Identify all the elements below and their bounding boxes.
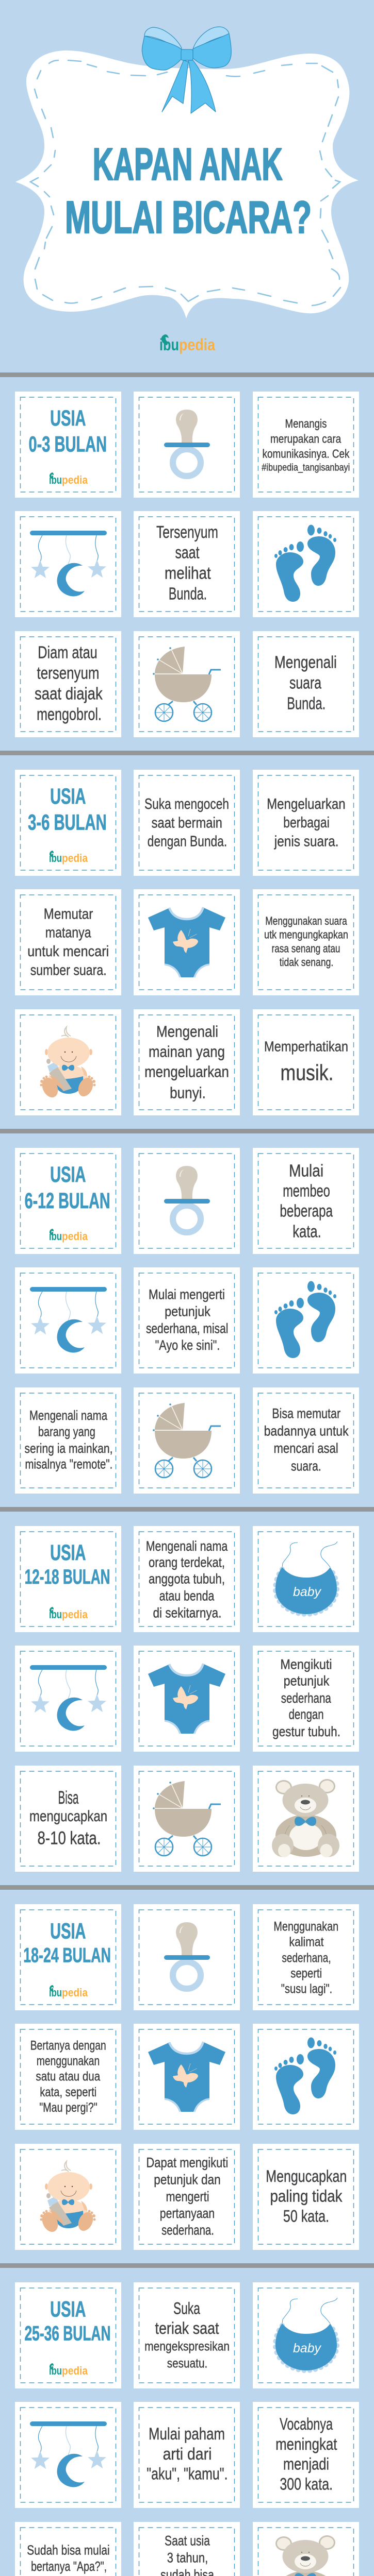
icon: baby [39,2161,96,2234]
text: menggunakan kalimat: sederhana, [282,1951,331,1965]
heading: usia 6-12 bulan [25,1162,110,1213]
icon: stroller [153,1781,221,1856]
text: menggunakan suara: rasa senang atau [271,942,340,955]
text: mengenali nama barang [25,1408,112,1472]
text: saat usia 3 tahun: Saat usia [165,2533,210,2549]
logo: ibupedia small: ibu [49,1230,62,1243]
text: diam atau [35,643,103,723]
text: vocabnya meningkat: Vocabnya [280,2415,333,2433]
text: bisa memutar: Bisa memutar [272,1405,340,1421]
text: menangis: komunikasinya. Cek [263,447,350,460]
text: mengenali mainan: bunyi. [170,1084,206,1102]
text: menggunakan kalimat: seperti [290,1966,322,1980]
text: bertanya dengan: Bertanya dengan [30,2038,106,2053]
text: mengenali nama orang [146,1538,228,1620]
heading: usia 0-3 bulan: USIA [50,406,86,431]
text: menggunakan suara [264,914,348,969]
logo: ibupedia [159,334,215,354]
logo: ibupedia small [49,1229,88,1243]
text: bertanya dengan: kata, seperti [40,2085,96,2099]
panel: card bib [253,1526,359,1632]
text: vocabnya meningkat [275,2415,337,2494]
text: mengenali mainan: mainan yang [149,1043,225,1061]
text: suka teriak: sesuatu. [167,2357,207,2371]
text: menangis: merupakan cara [270,432,341,445]
text: mulai membeo: kata. [292,1222,321,1241]
panel: card mobile [15,511,121,617]
panel: title plaque [15,50,359,318]
text: dapat mengikuti: Dapat mengikuti [146,2155,228,2171]
text: vocabnya meningkat: menjadi [283,2454,329,2473]
text: bisa memutar: mencari asal [273,1440,338,1456]
panel: card words text [15,1766,121,1872]
text: mengikuti petunjuk [272,1656,340,1739]
text: menggunakan kalimat [273,1919,338,1996]
text: saat usia 3 tahun [143,2533,231,2576]
panel: card onesie [134,1646,240,1752]
text: sudah bisa mulai: Sudah bisa mulai [27,2542,110,2557]
logo: ibupedia: ibu [159,335,179,354]
panel: card instruction text [134,1267,240,1374]
panel: card onesie [134,2024,240,2130]
text: menggunakan suara: utk mengungkapkan [264,928,348,941]
panel: card stroller [134,1387,240,1494]
text: tersenyum: Tersenyum [156,522,218,541]
heading: usia 3-6 bulan [28,784,107,835]
panel: card question text [15,2024,121,2130]
text: dapat mengikuti: pertanyaan [160,2206,215,2221]
text: mulai mengerti: sederhana, misal [146,1320,228,1336]
text: mulai membeo: membeo [283,1181,330,1200]
text: bertanya dengan: "Mau pergi?" [39,2100,97,2115]
heading: usia 12-18 bulan: USIA [50,1540,86,1565]
panel: card mobile [15,1267,121,1374]
logo: ibupedia small [49,851,88,865]
panel: card echo text [253,1148,359,1254]
text: mengucapkan 50 kata: paling tidak [270,2187,343,2205]
text: mulai mengerti: petunjuk [165,1303,210,1319]
icon: teddy bear [272,2535,339,2576]
text: mengenali nama barang: barang yang [38,1423,95,1439]
text: mengenali nama barang: misalnya "remote". [25,1456,112,1472]
panel: card gesture text [253,1646,359,1752]
icon: baby feet [274,524,336,602]
panel: card feelings text [253,889,359,995]
logo: ibupedia small: pedia [62,2364,88,2377]
text: menangis: Menangis [285,417,327,430]
text: suka mengoceh: Suka mengoceh [144,796,229,812]
icon: bib: baby [293,1585,321,1599]
icon: bib [275,1541,337,1614]
text: mengenali nama orang: anggota tubuh, [149,1571,225,1586]
text: mengenali nama barang: sering ia mainkan, [25,1440,112,1456]
text: saat usia 3 tahun: 3 tahun, [167,2550,208,2565]
text: tersenyum: melihat [165,563,211,582]
text: memutar matanya: Memutar [44,906,93,922]
text: mengucapkan 50 kata [266,2167,347,2226]
text: mulai mengerti: Mulai mengerti [149,1287,225,1302]
icon: stroller [153,647,221,721]
text: menangis: #ibupedia_tangisanbayi [262,462,350,473]
text: sudah bisa mulai [27,2542,110,2576]
text: mulai mengerti: "Ayo ke sini". [155,1337,220,1353]
icon: pacifier [164,410,210,476]
text: memutar matanya: untuk mencari [27,943,109,960]
panel: card bear [253,1766,359,1872]
text: diam atau: Diam atau [38,643,97,662]
panel: card eyes text [15,889,121,995]
panel: card turn text [253,1387,359,1494]
icon: baby mobile [30,1287,107,1352]
panel: usia 3-6 bulan heading card [15,770,121,876]
text: mengikuti petunjuk: sederhana [281,1690,332,1706]
panel: usia 0-3 bulan heading card [15,392,121,498]
text: memperhatikan musik [264,1039,348,1086]
text: bertanya dengan [30,2038,106,2115]
text: mulai membeo: Mulai [289,1161,323,1180]
text: mengenali mainan: mengeluarkan [144,1063,229,1081]
text: dapat mengikuti: mengerti [166,2189,209,2205]
text: suka mengoceh: dengan Bunda. [148,834,227,850]
text: bisa mengucapkan: 8-10 kata. [37,1828,101,1848]
text: diam atau: saat diajak [35,684,103,703]
panel: card onesie [134,889,240,995]
heading: usia 18-24 bulan: USIA [50,1919,86,1943]
panel: card feet [253,2024,359,2130]
text: mengeluarkan [267,796,346,850]
text: dapat mengikuti: sederhana. [161,2222,214,2238]
text: menggunakan suara: tidak senang. [280,956,333,969]
text: mengeluarkan: berbagai [283,815,330,831]
text: mengikuti petunjuk: petunjuk [284,1673,330,1689]
logo: ibupedia small: ibu [49,473,62,486]
text: mengenali suara: Bunda. [287,694,326,713]
text: suka teriak: Suka [173,2299,200,2318]
panel: card smile text [134,511,240,617]
text: mulai membeo: beberapa [280,1201,333,1221]
icon: stroller [153,1403,221,1478]
heading: usia 12-18 bulan [25,1540,110,1588]
text: mengenali nama orang: orang terdekat, [149,1555,225,1570]
text: mulai mengerti [146,1287,228,1353]
panel: usia 6-12 bulan heading card [15,1148,121,1254]
text: mengeluarkan: Mengeluarkan [267,796,346,812]
panel: card sentence text [253,1904,359,2010]
text: mulai paham [147,2425,228,2483]
heading: usia 18-24 bulan [23,1919,111,1967]
logo: ibupedia small: ibu [49,1608,62,1621]
text: vocabnya meningkat: 300 kata. [280,2475,333,2494]
text: mulai paham: Mulai paham [149,2425,225,2443]
text: mengenali mainan: Mengenali [156,1023,218,1041]
panel: card pronoun text [134,2402,240,2508]
panel: card baby [15,1009,121,1115]
text: tersenyum: Bunda. [169,584,207,603]
heading: usia 18-24 bulan: 18-24 BULAN [23,1944,111,1967]
text: mengikuti petunjuk: gestur tubuh. [272,1724,340,1739]
heading: usia 25-36 bulan: 25-36 BULAN [25,2322,110,2345]
panel: card pacifier [134,1904,240,2010]
panel: card crying text [253,392,359,498]
panel: card feet [253,1267,359,1374]
panel: card voice text [253,631,359,737]
panel: card follow text [134,2144,240,2250]
text: menggunakan suara: Menggunakan suara [265,914,347,927]
text: memperhatikan musik: musik. [281,1061,333,1086]
text: bisa mengucapkan: Bisa [58,1788,79,1808]
panel: card pacifier [134,392,240,498]
text: memutar matanya [27,906,109,978]
heading: usia 6-12 bulan: 6-12 BULAN [25,1189,110,1213]
logo: ibupedia small [49,472,88,486]
text: suka mengoceh: saat bermain [152,815,222,832]
text: suka teriak: teriak saat [155,2319,219,2337]
heading: usia 3-6 bulan: 3-6 BULAN [28,810,107,835]
text: menggunakan kalimat: "susu lagi". [281,1981,332,1996]
logo: ibupedia small [49,2363,88,2377]
panel: card babbling text [134,770,240,876]
text: dapat mengikuti [146,2155,228,2238]
text: dapat mengikuti: petunjuk dan [154,2172,221,2187]
logo: ibupedia small: ibu [49,1986,62,1999]
panel: card asking text [15,2522,121,2576]
text: memutar matanya: matanya [45,924,91,941]
logo: ibupedia small: pedia [62,473,88,486]
text: bertanya dengan: satu atau dua [36,2069,100,2083]
text: diam atau: mengobrol. [37,704,102,723]
text: bertanya dengan: menggunakan [37,2054,100,2068]
logo: ibupedia small: ibu [49,2364,62,2377]
text: memutar matanya: sumber suara. [30,962,107,978]
logo: ibupedia small [49,1985,88,1999]
logo: ibupedia small: pedia [62,1230,88,1243]
panel: usia 18-24 bulan heading card [15,1904,121,2010]
icon: baby mobile [30,531,107,596]
text: mulai paham: arti dari [163,2445,212,2463]
text: mengenali suara: suara [289,673,321,692]
icon: teddy bear [272,1779,339,1857]
icon: onesie [148,1664,225,1734]
panel: usia 25-36 bulan heading card [15,2282,121,2388]
panel: card feet [253,511,359,617]
text: tersenyum [156,522,218,603]
icon: pacifier [164,1922,210,1989]
text: mengenali suara [274,653,337,713]
panel: card people text [134,1526,240,1632]
panel: card names text [15,1387,121,1494]
icon: baby [39,1027,96,1100]
logo: ibupedia small [49,1607,88,1621]
heading: usia 0-3 bulan [28,406,107,457]
text: mengenali nama orang: Mengenali nama [146,1538,228,1554]
text: diam atau: tersenyum [37,663,99,682]
text: tersenyum: saat [175,543,199,562]
icon: bib: baby [293,2341,321,2355]
text: memperhatikan musik: Memperhatikan [264,1039,348,1055]
text: mengucapkan 50 kata: Mengucapkan [266,2167,347,2185]
panel: card shout text [134,2282,240,2388]
panel: card sounds text [253,770,359,876]
text: mengenali nama orang: atau benda [159,1588,215,1604]
panel: card vocabulary text [253,2402,359,2508]
panel: card toys text [134,1009,240,1115]
text: mulai paham: "aku", "kamu". [147,2465,228,2483]
heading: usia 3-6 bulan: USIA [50,784,86,809]
text: mengenali mainan [144,1023,229,1102]
text: mengikuti petunjuk: dengan [289,1707,324,1722]
panel: card calm text [15,631,121,737]
logo: ibupedia: pedia [179,335,215,354]
text: menangis [262,417,350,473]
text: mengenali nama barang: Mengenali nama [29,1408,108,1423]
panel: card stroller [134,1766,240,1872]
heading: usia 12-18 bulan: 12-18 BULAN [25,1566,110,1588]
text: suka teriak [144,2299,230,2371]
panel: card mobile [15,1646,121,1752]
heading: usia 6-12 bulan: USIA [50,1162,86,1187]
panel: card mobile [15,2402,121,2508]
text: mulai membeo [280,1161,333,1241]
text: bisa memutar [264,1405,349,1473]
text: bisa mengucapkan [29,1788,107,1848]
logo: ibupedia small: pedia [62,1986,88,1999]
text: suka mengoceh [144,796,229,850]
icon: pacifier [164,1166,210,1232]
text: mengucapkan 50 kata: 50 kata. [283,2207,329,2226]
title [65,139,312,243]
heading: usia 25-36 bulan [25,2297,110,2345]
text: mengikuti petunjuk: Mengikuti [280,1656,332,1672]
panel: card bear [253,2522,359,2576]
icon: baby mobile [30,2421,107,2487]
panel: card music text [253,1009,359,1115]
text: menggunakan kalimat: kalimat [289,1935,324,1949]
heading: usia 0-3 bulan: 0-3 BULAN [28,432,107,457]
panel: card baby [15,2144,121,2250]
text: mengeluarkan: jenis suara. [274,834,339,850]
text: bisa memutar: suara. [291,1458,321,1473]
text: suka teriak: mengekspresikan [144,2340,230,2354]
text: mengenali nama orang: di sekitarnya. [153,1605,222,1620]
icon: onesie [148,2042,225,2112]
logo: ibupedia small: ibu [49,852,62,865]
text: bisa memutar: badannya untuk [264,1423,349,1439]
panel: card bib [253,2282,359,2388]
icon: baby feet [274,1281,336,1358]
logo: ibupedia small: pedia [62,1608,88,1621]
panel: card pacifier [134,1148,240,1254]
icon: ribbon bow [142,27,231,113]
text: sudah bisa mulai: bertanya "Apa?", [31,2558,107,2574]
text: mengenali suara: Mengenali [274,653,337,672]
panel: usia 12-18 bulan heading card [15,1526,121,1632]
logo: ibupedia small: pedia [62,852,88,865]
panel: card stroller [134,631,240,737]
text: menggunakan kalimat: Menggunakan [273,1919,338,1934]
text: bisa mengucapkan: mengucapkan [29,1808,107,1825]
panel: card fifty words text [253,2144,359,2250]
icon: baby mobile [30,1665,107,1731]
icon: baby feet [274,2037,336,2114]
icon: onesie [148,907,225,977]
text: vocabnya meningkat: meningkat [275,2435,337,2453]
icon: bib [275,2298,337,2370]
heading: usia 25-36 bulan: USIA [50,2297,86,2322]
panel: card chat text [134,2522,240,2576]
